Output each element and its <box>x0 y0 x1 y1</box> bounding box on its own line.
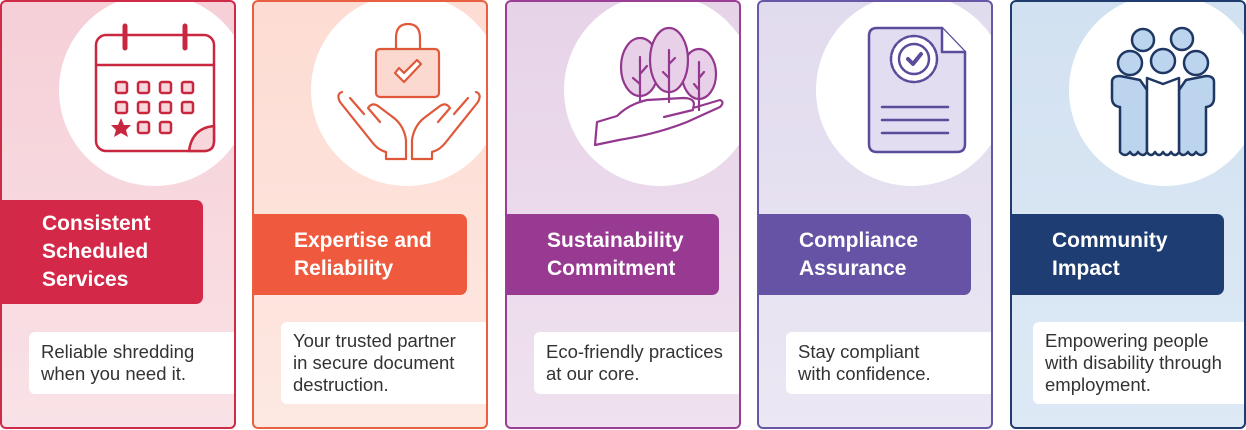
title label: Expertise and <box>294 228 432 252</box>
description: with confidence. <box>798 363 931 384</box>
description: Reliable shredding <box>41 341 194 362</box>
description: Your trusted partner <box>293 330 456 351</box>
title label <box>1009 214 1224 295</box>
title label: Services <box>42 268 128 291</box>
description: employment. <box>1045 374 1151 395</box>
description: at our core. <box>546 363 640 384</box>
description: in secure document <box>293 352 454 373</box>
description <box>29 332 239 394</box>
title label: Commitment <box>547 256 675 280</box>
panel: expertise and reliability <box>252 0 488 429</box>
description: Stay compliant <box>798 341 919 362</box>
description <box>1033 322 1246 404</box>
title label: Consistent <box>42 212 151 235</box>
title label: Reliability <box>294 256 393 280</box>
description: destruction. <box>293 374 389 395</box>
description: Eco-friendly practices <box>546 341 723 362</box>
title label <box>251 214 467 295</box>
description: with disability through <box>1045 352 1222 373</box>
description <box>281 322 491 404</box>
description: Empowering people <box>1045 330 1209 351</box>
title label <box>756 214 971 295</box>
panel: consistent scheduled services <box>0 0 236 429</box>
title label: Sustainability <box>547 228 684 252</box>
icon: group of people <box>1110 26 1216 156</box>
panel: community impact <box>1010 0 1246 429</box>
title label: Compliance <box>799 228 918 252</box>
title label <box>504 214 719 295</box>
panel: compliance assurance <box>757 0 993 429</box>
title label: Assurance <box>799 256 906 280</box>
description <box>786 332 996 394</box>
description: when you need it. <box>41 363 186 384</box>
title label: Community <box>1052 228 1168 252</box>
icon: calendar <box>94 24 216 152</box>
icon: certified document <box>868 26 966 154</box>
title label <box>0 200 203 304</box>
description <box>534 332 744 394</box>
title label: Impact <box>1052 256 1120 280</box>
panel: sustainability commitment <box>505 0 741 429</box>
title label: Scheduled <box>42 240 148 263</box>
icon: lock in hands <box>337 22 481 160</box>
icon: trees in hand <box>594 26 724 146</box>
